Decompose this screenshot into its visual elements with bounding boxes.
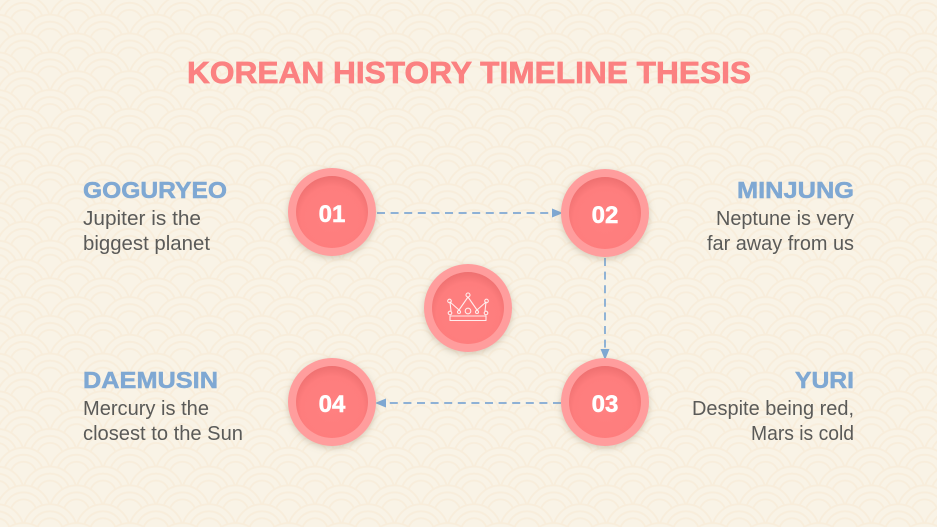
text block: Goguryeo: [83, 177, 227, 255]
node 01: [288, 168, 376, 256]
node 04: [288, 358, 376, 446]
title: KOREAN HISTORY TIMELINE THESIS: [187, 55, 751, 90]
text block: Daemusin: [83, 367, 243, 445]
node 02: 02: [592, 202, 618, 229]
node 03: [561, 358, 649, 446]
node 03: 03: [592, 391, 618, 418]
icon: crown: [448, 293, 488, 320]
text block: Daemusin: DAEMUSIN: [83, 367, 218, 393]
text block: Daemusin: Mercury is the: [83, 398, 209, 420]
text block: Minjung: far away from us: [707, 233, 854, 255]
node 02: [561, 169, 649, 257]
text block: Goguryeo: biggest planet: [83, 233, 210, 255]
arrow: 02 to 03: [600, 258, 610, 360]
text block: Goguryeo: GOGURYEO: [83, 177, 227, 203]
text block: Yuri: YURI: [795, 367, 854, 393]
node 04: 04: [319, 391, 346, 418]
text block: Minjung: MINJUNG: [737, 177, 854, 203]
node 01: 01: [319, 201, 345, 228]
arrow: 01 to 02: [377, 208, 563, 218]
arrow: 03 to 04: [375, 398, 561, 408]
text block: Minjung: [707, 177, 854, 255]
text block: Yuri: Mars is cold: [751, 423, 854, 445]
text block: Yuri: Despite being red,: [692, 398, 854, 420]
center crown badge: [424, 264, 512, 352]
text block: Minjung: Neptune is very: [716, 208, 854, 230]
text block: Daemusin: closest to the Sun: [83, 423, 243, 445]
text block: Yuri: [692, 367, 854, 445]
text block: Goguryeo: Jupiter is the: [83, 208, 201, 230]
